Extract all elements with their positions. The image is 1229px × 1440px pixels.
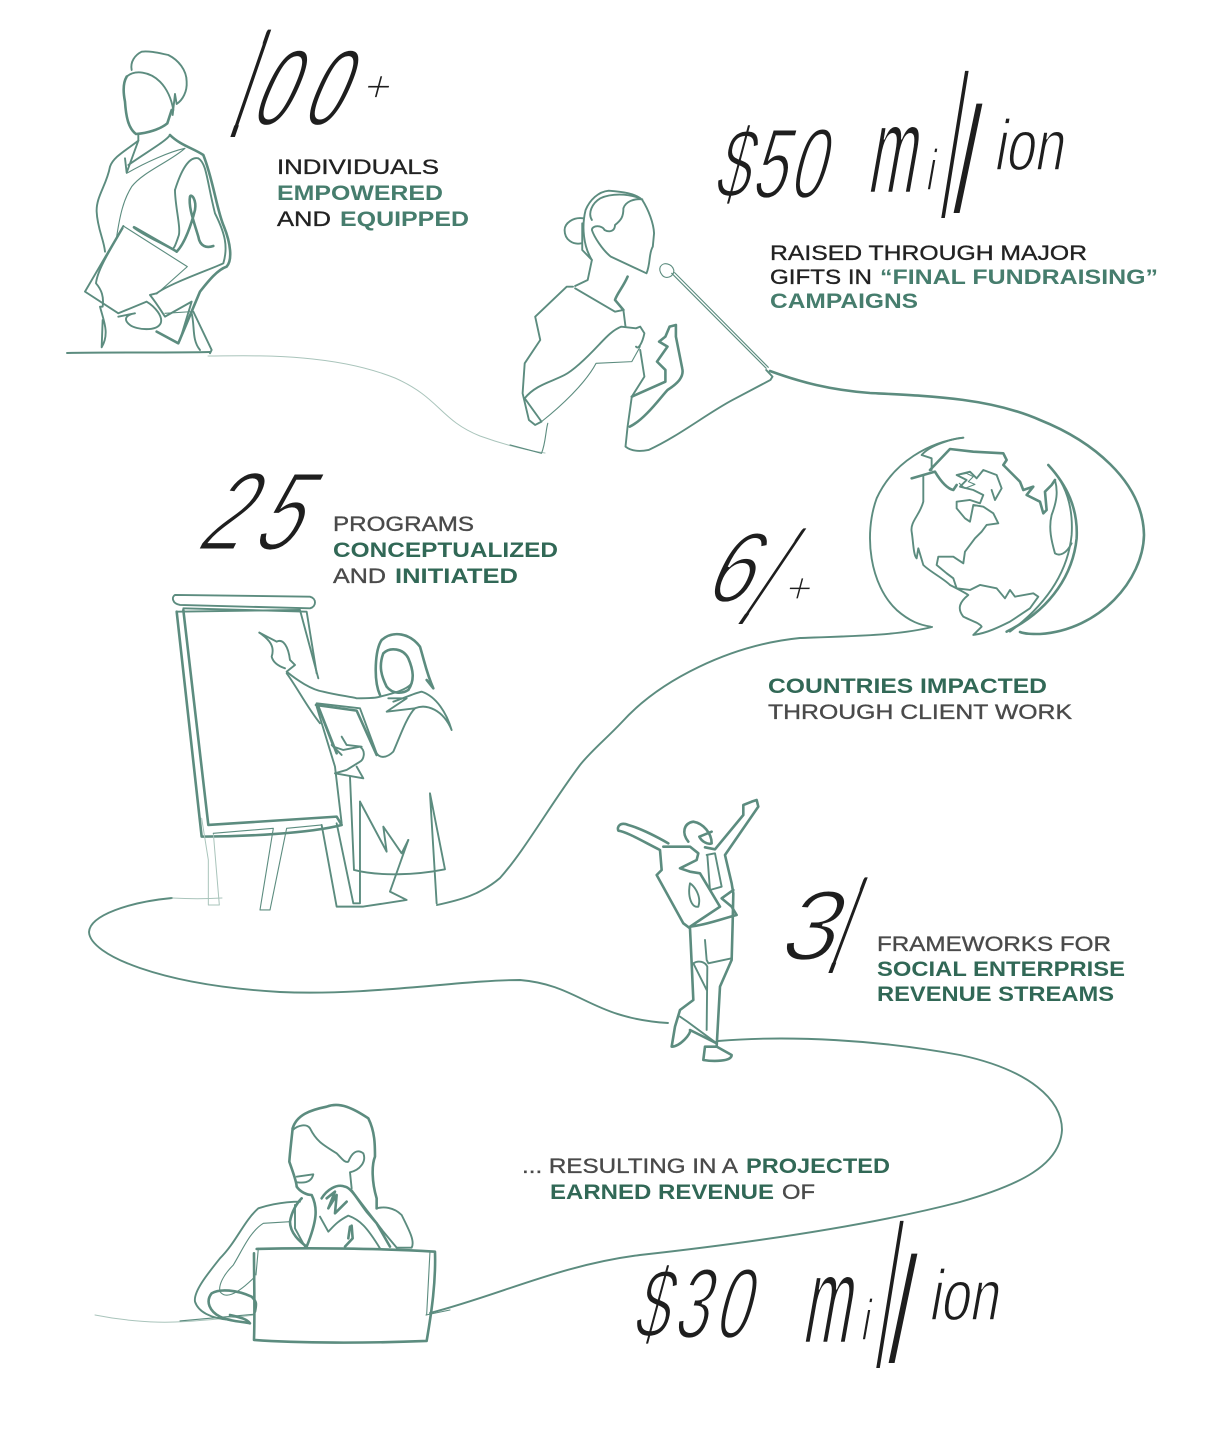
caption: programs conceptualized: AND [333,565,386,588]
caption: raised through major gifts: “FINAL FUNDRAISING” [880,266,1158,289]
big number $50 million: l [942,77,992,246]
caption: resulting in projected earned revenue: EARNED REVENUE [550,1181,774,1204]
caption: programs conceptualized: CONCEPTUALIZED [333,539,558,562]
big number 31: 3 [768,870,864,981]
caption: individuals empowered: INDIVIDUALS [277,156,439,179]
illustration: adult lifting child on shoulders [618,800,758,1061]
big number $30 million: ion [925,1256,1008,1336]
big number $30 million: l [877,1227,927,1396]
big number $50 million: l [931,36,977,262]
big number $50 million: m [861,80,934,220]
caption: programs conceptualized [333,513,558,588]
big number 31 [786,877,868,973]
caption: individuals empowered: AND [277,208,331,231]
caption: programs conceptualized: INITIATED [395,565,518,588]
caption: countries impacted: THROUGH CLIENT WORK [768,701,1072,724]
big number 61+: + [780,564,819,613]
big number $50 million [706,36,1073,262]
caption: programs conceptualized: PROGRAMS [333,513,474,536]
caption: countries impacted: COUNTRIES IMPACTED [768,675,1047,698]
big number $30 million [625,1186,1008,1412]
caption: resulting in projected earned revenue: OF [782,1181,815,1204]
caption: raised through major gifts: CAMPAIGNS [770,290,918,313]
caption: countries impacted [768,675,1072,724]
big number 25: 25 [181,449,355,575]
panel: $30 million projected [180,1105,1008,1412]
big number 31: 1 [809,847,887,1003]
caption: resulting in projected earned revenue [522,1155,890,1204]
caption: resulting in projected earned revenue: ... RESULTING IN A [522,1155,738,1178]
illustration: one-line globe [870,438,1077,635]
caption: raised through major gifts: GIFTS IN [770,266,872,289]
big number $50 million: i [923,138,942,203]
big number 61+: 6 [691,511,789,624]
big number 61+ [714,528,810,624]
big number $30 million: m [796,1230,869,1370]
big number $30 million: l [866,1186,912,1412]
winding path connecting the stats [67,352,1144,1322]
illustration: woman thinking at laptop [180,1105,450,1343]
panel: 100+ individuals [85,0,469,353]
big number 100+: 1 [209,0,291,171]
big number $50 million: ion [990,106,1073,186]
illustration: presenter at flip chart [173,595,452,910]
caption: frameworks for social enterprise [877,933,1125,1006]
caption: individuals empowered: EMPOWERED [277,182,443,205]
big number 61+: 1 [710,498,835,654]
panel: 31 frameworks [618,800,1125,1061]
caption: frameworks for social enterprise: SOCIAL ENTERPRISE [877,958,1125,981]
caption: raised through major gifts: RAISED THROUGH MAJOR [770,242,1087,265]
big number 100+: 00 [237,27,393,148]
big number 100+: + [358,61,399,112]
illustration: woman holding folder [85,51,230,353]
big number $50 million: $50 [706,109,849,220]
caption: raised through major gifts [770,242,1158,313]
caption: individuals empowered [277,156,469,231]
caption: resulting in projected earned revenue: PROJECTED [746,1155,890,1178]
illustration: woman speaking at microphone [510,191,772,453]
caption: frameworks for social enterprise: REVENUE STREAMS [877,983,1114,1006]
caption: individuals empowered: EQUIPPED [340,208,469,231]
caption: frameworks for social enterprise: FRAMEWORKS FOR [877,933,1111,956]
big number $30 million: $30 [625,1249,777,1360]
panel: 25 programs [173,449,558,910]
big number $30 million: i [858,1288,877,1353]
panel: 61+ countries [691,438,1077,724]
panel: $50 million raised [510,36,1158,453]
